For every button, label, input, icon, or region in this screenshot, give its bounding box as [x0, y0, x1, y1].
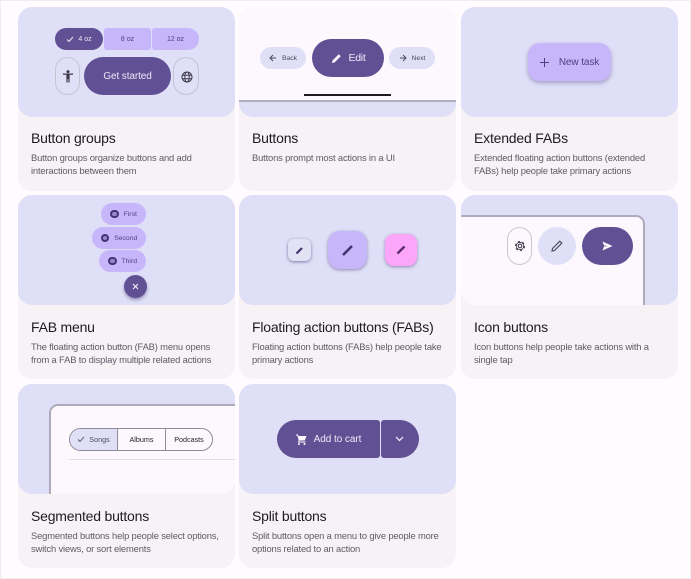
small FAB	[288, 239, 311, 261]
segment: songs	[70, 429, 118, 450]
menu item: second: Second	[114, 234, 137, 242]
selected button: 4 oz	[55, 28, 103, 50]
description: FABs) help people take primary actions	[474, 165, 631, 176]
illustration: icon buttons	[461, 195, 678, 305]
description	[252, 341, 442, 365]
heading: Buttons	[252, 130, 298, 146]
menu item: third: Third	[122, 258, 137, 264]
heading: Segmented buttons	[31, 508, 149, 524]
description: Icon buttons help people take actions with a	[474, 341, 649, 352]
button: 8 oz	[104, 28, 151, 50]
icon: gear	[515, 241, 525, 251]
illustration: extended FAB	[461, 7, 678, 117]
icon: close	[132, 284, 138, 290]
heading: FAB menu	[31, 319, 95, 335]
button: globe	[173, 57, 199, 95]
home indicator	[304, 94, 391, 96]
panel: button groups	[18, 7, 235, 191]
segment: albums: Albums	[130, 435, 153, 444]
button: back	[260, 47, 306, 69]
button: dropdown	[381, 420, 419, 458]
description: Split buttons open a menu to give people more	[252, 530, 439, 541]
button: get started: Get started	[103, 70, 152, 82]
phone screen	[239, 7, 456, 102]
icon: pencil	[342, 245, 353, 256]
illustration: split button	[239, 384, 456, 494]
panel: split buttons	[239, 384, 456, 568]
tertiary FAB	[385, 234, 417, 266]
description	[474, 152, 645, 176]
description: Extended floating action buttons (extended	[474, 152, 645, 163]
button: add to cart	[277, 420, 380, 458]
button: next	[389, 47, 435, 69]
description: Segmented buttons help people select options,	[31, 530, 219, 541]
description	[474, 341, 649, 365]
divider line	[69, 459, 235, 460]
FAB: new task: New task	[559, 56, 599, 68]
description	[31, 530, 219, 554]
description: Floating action buttons (FABs) help people take	[252, 341, 441, 352]
icon: chevron	[396, 436, 404, 442]
button: settings	[507, 227, 532, 265]
selected button: 4 oz: 4 oz	[78, 36, 92, 42]
heading: Floating action buttons (FABs)	[252, 319, 434, 335]
description	[31, 341, 212, 365]
description: The floating action button (FAB) menu opens	[31, 341, 210, 352]
illustration: FABs	[239, 195, 456, 305]
icon: accessibility figure	[63, 70, 73, 82]
segment: songs: Songs	[89, 435, 110, 444]
device screen	[49, 404, 249, 504]
panel: icon buttons	[461, 195, 678, 379]
panel: buttons	[239, 7, 456, 191]
illustration: segmented buttons	[18, 384, 235, 494]
segment: podcasts: Podcasts	[174, 435, 204, 444]
description: interactions between them	[31, 165, 136, 176]
button: edit	[312, 39, 384, 77]
description: options related to an action	[252, 543, 360, 554]
medium FAB	[328, 231, 367, 269]
description: switch views, or sort elements	[31, 543, 151, 554]
description	[31, 152, 192, 176]
menu item: first	[101, 203, 146, 225]
panel: floating action buttons	[239, 195, 456, 379]
icon: pencil	[296, 247, 303, 254]
FAB: new task	[528, 43, 611, 81]
illustration: button groups	[18, 7, 235, 117]
icon: pencil outline	[551, 240, 562, 252]
FAB: close	[124, 275, 147, 298]
segment: albums	[118, 429, 166, 450]
heading: Extended FABs	[474, 130, 568, 146]
button: next: Next	[412, 54, 425, 62]
button: 8 oz: 8 oz	[121, 36, 134, 42]
button: 12 oz: 12 oz	[167, 36, 184, 42]
icon: pencil	[396, 246, 406, 254]
device screen	[451, 215, 645, 315]
panel: extended FABs	[461, 7, 678, 191]
button: accessibility	[55, 57, 80, 95]
button: add to cart: Add to cart	[314, 434, 361, 444]
description	[252, 530, 439, 554]
button: edit: Edit	[349, 52, 365, 64]
description: primary actions	[252, 354, 313, 365]
menu item: first: First	[124, 210, 137, 218]
button: back: Back	[282, 54, 297, 62]
icon: globe	[182, 72, 192, 82]
button: 12 oz	[152, 28, 199, 50]
heading: Button groups	[31, 130, 116, 146]
button: pencil	[538, 227, 576, 265]
heading: Split buttons	[252, 508, 326, 524]
button: get started	[84, 57, 171, 95]
button: send	[582, 227, 633, 265]
panel: segmented buttons	[18, 384, 235, 568]
description: from a FAB to display multiple related actions	[31, 354, 211, 365]
description: single tap	[474, 354, 513, 365]
menu item: third	[99, 250, 146, 272]
panel: FAB menu	[18, 195, 235, 379]
illustration: buttons	[239, 7, 456, 117]
segmented control	[69, 428, 213, 451]
heading: Icon buttons	[474, 319, 548, 335]
icon: send	[602, 242, 612, 250]
menu item: second	[92, 227, 146, 249]
description: Button groups organize buttons and add	[31, 152, 192, 163]
description: Buttons prompt most actions in a UI	[252, 152, 395, 163]
illustration: FAB menu	[18, 195, 235, 305]
